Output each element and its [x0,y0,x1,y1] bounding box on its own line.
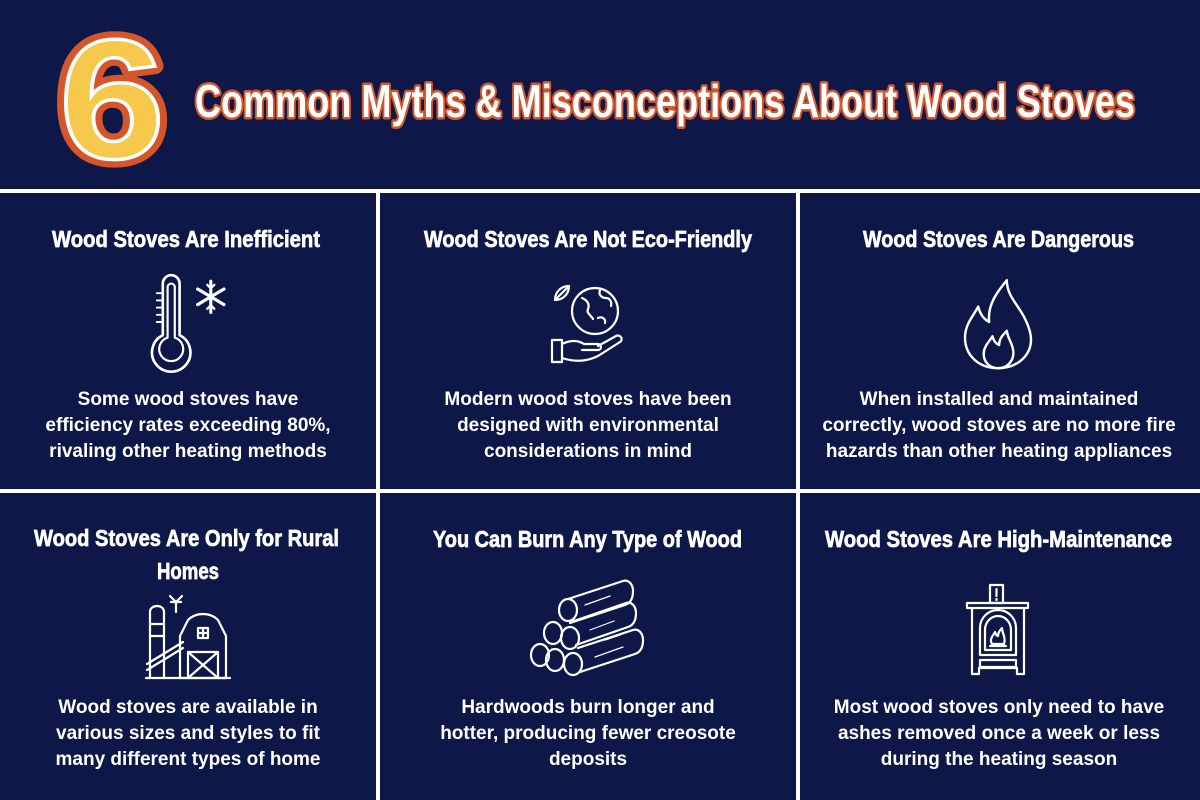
body text: considerations in mind [484,441,692,462]
body text: during the heating season [881,749,1117,770]
body text: Modern wood stoves have been [444,389,732,410]
icon: thermometer and snowflake [152,275,224,372]
body text: Wood stoves are available in [58,697,318,718]
heading: Homes [157,558,219,584]
big number 6: 6 [59,5,165,195]
panel: dangerous [822,226,1176,462]
body text: many different types of home [56,749,320,770]
panel: rural [34,525,339,770]
grid dividers [0,189,1200,800]
body text: ashes removed once a week or less [838,723,1160,744]
body text: hotter, producing fewer creosote [440,723,736,744]
body text: deposits [549,749,627,770]
body text: designed with environmental [457,415,719,436]
panel: maintenance [825,526,1172,770]
heading: Wood Stoves Are Dangerous [863,226,1134,252]
body text: Some wood stoves have [78,389,298,410]
icon: log pile [531,581,643,675]
body text: efficiency rates exceeding 80%, [45,415,331,436]
big number 6: 6 [59,5,165,195]
heading: You Can Burn Any Type of Wood [433,526,742,552]
panel: any wood [433,526,742,770]
body text: Hardwoods burn longer and [461,697,715,718]
panel: inefficient [45,226,331,462]
body text: Most wood stoves only need to have [834,697,1164,718]
body text: When installed and maintained [860,389,1138,410]
body text: various sizes and styles to fit [56,723,321,744]
icon: wood stove [967,585,1028,674]
body text: rivaling other heating methods [49,441,327,462]
body text: hazards than other heating appliances [826,441,1172,462]
icon: globe in hand [552,286,622,362]
panel: eco-friendly [424,226,752,462]
body text: correctly, wood stoves are no more fire [822,415,1176,436]
icon: barn [146,596,230,678]
heading: Wood Stoves Are Only for Rural [34,525,339,551]
heading: Wood Stoves Are Not Eco-Friendly [424,226,752,252]
icon: flame [965,280,1031,368]
heading: Wood Stoves Are Inefficient [52,226,320,252]
